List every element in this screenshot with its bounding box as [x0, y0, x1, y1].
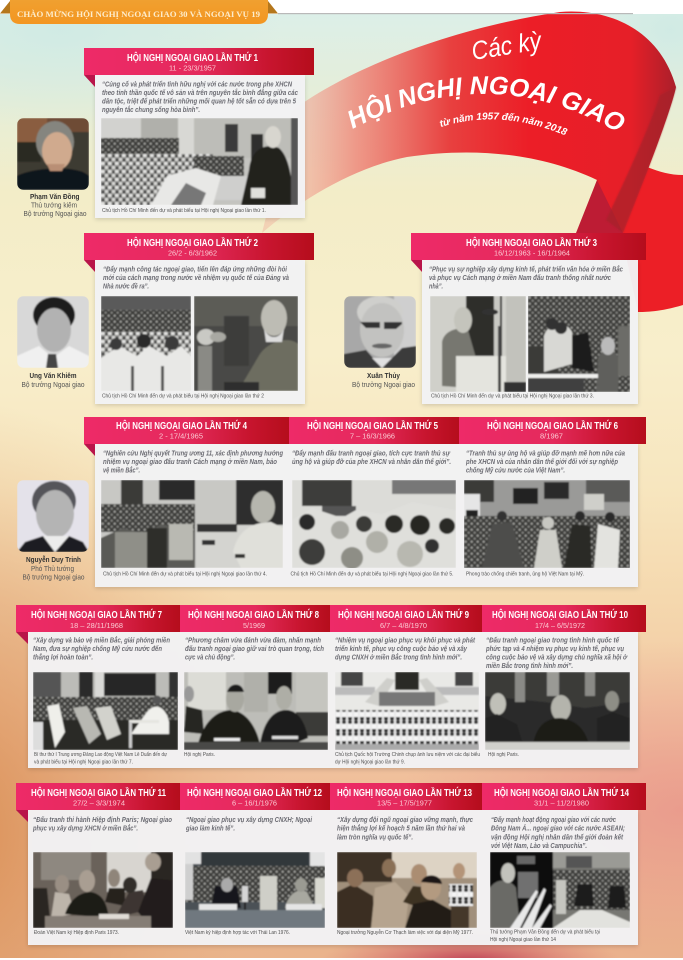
conference 11: “Đấu tranh thi hành Hiệp định Paris; Ngoại giao — [33, 815, 172, 824]
conference 14: với Việt Nam, Lào và Campuchia”. — [491, 841, 587, 850]
person: Ung Văn Khiêm: Bộ trưởng Ngoại giao — [22, 380, 84, 389]
conference 5: “Đẩy mạnh đấu tranh ngoại giao, tích cực tranh thủ sự — [292, 448, 450, 458]
panel: conference 3: nhà”. — [429, 282, 443, 290]
conference 7: HỘI NGHỊ NGOẠI GIAO LẦN THỨ 7 — [31, 609, 162, 621]
panel: conference 2: HỘI NGHỊ NGOẠI GIAO LẦN THỨ 2 — [127, 237, 258, 249]
conference 4 — [84, 417, 289, 578]
conference 11: 27/2 – 3/3/1974 — [73, 798, 125, 808]
conference 12: giao làm kinh tế”. — [185, 824, 235, 833]
conference 10: Hội nghị Paris. — [488, 752, 519, 758]
person: Nguyễn Duy Trinh — [17, 480, 89, 582]
panel: conference 2: Nhà nước đề ra”. — [103, 282, 149, 290]
conference 6: phe XHCN và của nhân dân thế giới đối với sự nghiệp — [465, 457, 618, 466]
conference 11: phục vụ xây dựng XHCN ở miền Bắc”. — [32, 824, 138, 833]
panel: conference 1 — [84, 48, 314, 218]
title: Các kỳ — [469, 25, 545, 66]
conference 10: “Đấu tranh ngoại giao trong tình hình quốc tế — [486, 636, 620, 644]
conference 10: công cuộc bảo vệ và xây dựng chủ nghĩa xã hội ở — [486, 652, 628, 662]
conference 12: 6 – 16/1/1976 — [232, 798, 277, 808]
person: Nguyễn Duy Trinh: Nguyễn Duy Trinh — [26, 555, 81, 564]
panel: conference 1: dân tộc, triệt để phát triển những mối quan hệ tốt sẵn có dựa trên 5 — [102, 96, 297, 106]
conference 4: “Nghiên cứu Nghị quyết Trung ương 11, xác định phương hướng — [103, 448, 283, 458]
title: HỘI NGHỊ NGOẠI GIAO — [348, 76, 624, 130]
conference 7: “Xây dựng và bảo vệ miền Bắc, giải phóng miền — [33, 636, 170, 644]
person: Xuân Thủy: Xuân Thủy — [367, 371, 401, 380]
panel: conference 3: Chủ tịch Hồ Chí Minh đến dự và phát biểu tại Hội nghị Ngoại giao lần thứ 3. — [431, 392, 594, 400]
conference 8: 5/1969 — [243, 621, 265, 630]
person: Ung Văn Khiêm — [17, 296, 89, 389]
conference 14 — [482, 783, 646, 943]
conference 13 — [330, 783, 482, 936]
conference 13: HỘI NGHỊ NGOẠI GIAO LẦN THỨ 13 — [337, 787, 472, 799]
title: từ năm 1957 đến năm 2018 — [440, 112, 568, 135]
conference 4: Chủ tịch Hồ Chí Minh đến dự và phát biểu tại Hội nghị Ngoại giao lần thứ 4. — [103, 570, 267, 578]
conference 5: ủng hộ và giúp đỡ của phe XHCN và nhân dân thế giới”. — [292, 457, 451, 466]
conference 5: 7 – 16/3/1966 — [350, 432, 395, 440]
conference 4: vệ miền Bắc”. — [103, 466, 140, 474]
conference 12: HỘI NGHỊ NGOẠI GIAO LẦN THỨ 12 — [187, 787, 322, 799]
person: Phạm Văn Đồng: Phạm Văn Đồng — [30, 192, 80, 201]
conference 8 — [180, 605, 330, 758]
panel: conference 3: và phục vụ Cách mạng ở miền Nam đấu tranh thống nhất nước — [429, 273, 612, 282]
person: Phạm Văn Đồng: Bộ trưởng Ngoại giao — [24, 209, 86, 218]
conference 4: HỘI NGHỊ NGOẠI GIAO LẦN THỨ 4 — [116, 420, 247, 432]
person: Nguyễn Duy Trinh: Phó Thủ tướng — [31, 564, 74, 573]
conference 6: chống Mỹ cứu nước của Việt Nam”. — [466, 466, 565, 474]
panel: conference 2: “Đẩy mạnh công tác ngoại giao, tiến lên đáp ứng những đòi hỏi — [103, 264, 288, 274]
conference 10 — [482, 605, 646, 758]
panel: conference 3: 16/12/1963 - 16/1/1964 — [494, 248, 570, 258]
top header tab — [0, 0, 633, 24]
panel: conferences 11 to 14 — [16, 783, 646, 945]
conference 9 — [330, 605, 482, 766]
panel: conference 1: nguyên tắc chung sống hòa bình”. — [102, 105, 200, 114]
conference 11 — [16, 783, 180, 936]
person: Phạm Văn Đồng — [17, 118, 89, 218]
conference 13: làm tròn nghĩa vụ quốc tế”. — [337, 832, 413, 842]
conference 7: Nam, đưa sự nghiệp chống Mỹ cứu nước đến — [33, 644, 162, 653]
conference 4: 2 - 17/4/1965 — [159, 432, 203, 440]
conference 14: vận động Hội nghị nhân dân thế giới đoàn kết — [491, 832, 623, 842]
conference 12: “Ngoại giao phục vụ xây dựng CNXH; Ngoại — [186, 815, 313, 824]
panel: conference 2 — [84, 233, 314, 404]
conference 7: và phát biểu tại Hội nghị Ngoại giao lần thứ 7. — [34, 758, 133, 766]
panel: conference 3: “Phục vụ sự nghiệp xây dựng kinh tế, phát triển văn hóa ở miền Bắc — [429, 264, 624, 274]
person: Xuân Thủy: Bộ trưởng Ngoại giao — [352, 380, 415, 389]
panel: conference 1: “Củng cố và phát triển tình hữu nghị với các nước trong phe XHCN — [102, 80, 292, 88]
conference 4: nhiệm vụ ngoại giao đấu tranh Cách mạng ở miền Nam, bảo — [103, 457, 277, 466]
panel: conference 3 — [411, 233, 646, 404]
conference 12: Việt Nam ký hiệp định hợp tác với Thái Lan 1976. — [185, 930, 290, 936]
conference 7: 18 – 28/11/1968 — [70, 621, 123, 630]
conference 6 — [459, 417, 646, 578]
conference 14: 31/1 – 11/2/1980 — [534, 798, 589, 808]
conference 14: Hội nghị Ngoại giao lần thứ 14 — [490, 937, 556, 943]
panel: conference 2: Chủ tịch Hồ Chí Minh đến dự và phát biểu tại Hội nghị Ngoại giao lần thứ 2 — [102, 392, 264, 400]
conference 13: 13/5 – 17/5/1977 — [377, 798, 432, 808]
conference 10: 17/4 – 6/5/1972 — [535, 621, 585, 630]
conference 12 — [180, 783, 330, 936]
conference 9: dựng CNXH ở miền Bắc trong tình hình mới”. — [335, 652, 462, 662]
conference 14: Đông Nam Á... ngoại giao với các nước ASEAN; — [491, 824, 625, 833]
panel: conference 1: HỘI NGHỊ NGOẠI GIAO LẦN THỨ 1 — [127, 52, 258, 64]
conference 5: HỘI NGHỊ NGOẠI GIAO LẦN THỨ 5 — [307, 420, 438, 432]
person: Ung Văn Khiêm: Ung Văn Khiêm — [30, 371, 77, 380]
panel: conferences 7 to 10 — [16, 605, 646, 768]
conference 8: cực và chủ động”. — [185, 652, 235, 662]
conference 13: Ngoại trưởng Nguyễn Cơ Thạch làm việc với đại diện Mỹ 1977. — [337, 929, 473, 936]
conference 9: Chủ tịch Quốc hội Trường Chinh chụp ảnh lưu niệm với các đại biểu — [335, 751, 480, 758]
conference 14: HỘI NGHỊ NGOẠI GIAO LẦN THỨ 14 — [494, 787, 629, 799]
conference 9: “Nhiệm vụ ngoại giao phục vụ khôi phục và phát — [335, 636, 475, 644]
conference 13: hiện thắng lợi kế hoạch 5 năm lần thứ hai và — [337, 824, 465, 833]
conference 10: miền Bắc trong tình hình mới”. — [486, 661, 573, 670]
conference 8: “Phương châm vừa đánh vừa đàm, nhấn mạnh — [185, 636, 321, 644]
conference 7: Bí thư thứ I Trung ương Đảng Lao động Việt Nam Lê Duẩn đến dự — [34, 751, 168, 758]
conference 7 — [16, 605, 180, 766]
conference 14: Thủ tướng Phạm Văn Đồng đến dự và phát biểu tại — [490, 928, 600, 936]
panel: conference 2: 26/2 - 6/3/1962 — [168, 248, 217, 258]
title — [348, 25, 624, 135]
person: Xuân Thủy — [344, 296, 416, 389]
ribbon banner — [262, 12, 683, 312]
conference 11: HỘI NGHỊ NGOẠI GIAO LẦN THỨ 11 — [31, 787, 166, 799]
panel: conference 2: mới của cách mạng trong nước về nhiệm vụ quốc tế của Đảng và — [103, 273, 289, 282]
top header tab: CHÀO MỪNG HỘI NGHỊ NGOẠI GIAO 30 VÀ NGOẠI VỤ 19 — [17, 9, 260, 19]
conference 11: Đoàn Việt Nam ký Hiệp định Paris 1973. — [34, 930, 119, 936]
conference 8: Hội nghị Paris. — [184, 752, 215, 758]
conference 5: Chủ tịch Hồ Chí Minh đến dự và phát biểu tại Hội nghị Ngoại giao lần thứ 5. — [290, 570, 454, 578]
conference 7: thắng lợi hoàn toàn”. — [33, 652, 93, 662]
conference 10: HỘI NGHỊ NGOẠI GIAO LẦN THỨ 10 — [492, 609, 628, 621]
conference 9: 6/7 – 4/8/1970 — [380, 621, 427, 630]
panel: conferences 4 to 6 — [84, 417, 646, 587]
conference 6: “Tranh thủ sự ủng hộ và giúp đỡ mạnh mẽ hơn nữa của — [466, 448, 625, 458]
conference 5 — [289, 417, 459, 578]
conference 8: HỘI NGHỊ NGOẠI GIAO LẦN THỨ 8 — [188, 609, 319, 621]
conference 9: HỘI NGHỊ NGOẠI GIAO LẦN THỨ 9 — [338, 609, 469, 621]
conference 6: 8/1967 — [540, 432, 563, 440]
conference 13: “Xây dựng đội ngũ ngoại giao vững mạnh, thực — [337, 815, 474, 824]
conference 9: triển kinh tế, phục vụ công cuộc bảo vệ và xây — [335, 644, 468, 653]
person: Nguyễn Duy Trinh: Bộ trưởng Ngoại giao — [22, 572, 84, 582]
panel: conference 1: Chủ tịch Hồ Chí Minh đến dự và phát biểu tại Hội nghị Ngoại giao lần thứ 1. — [102, 207, 266, 214]
conference 14: “Đẩy mạnh hoạt động ngoại giao với các nước — [491, 815, 617, 824]
conference 8: đấu tranh ngoại giao giữ vai trò quan trọng, tích — [185, 644, 324, 653]
panel: conference 3: HỘI NGHỊ NGOẠI GIAO LẦN THỨ 3 — [466, 237, 597, 249]
conference 6: Phong trào chống chiến tranh, ủng hộ Việt Nam tại Mỹ. — [466, 570, 584, 578]
conference 10: phức tạp và 4 nhiệm vụ phục vụ kinh tế, phục vụ — [485, 644, 624, 653]
conference 6: HỘI NGHỊ NGOẠI GIAO LẦN THỨ 6 — [487, 420, 618, 432]
panel: conference 1: 11 - 23/3/1957 — [169, 64, 216, 72]
person: Phạm Văn Đồng: Thủ tướng kiêm — [31, 200, 77, 210]
conference 9: dự Hội nghị Ngoại giao lần thứ 9. — [335, 760, 405, 766]
panel: conference 1: theo tinh thần quốc tế vô sản và trên nguyên tắc bình đẳng giữa các — [102, 88, 299, 97]
